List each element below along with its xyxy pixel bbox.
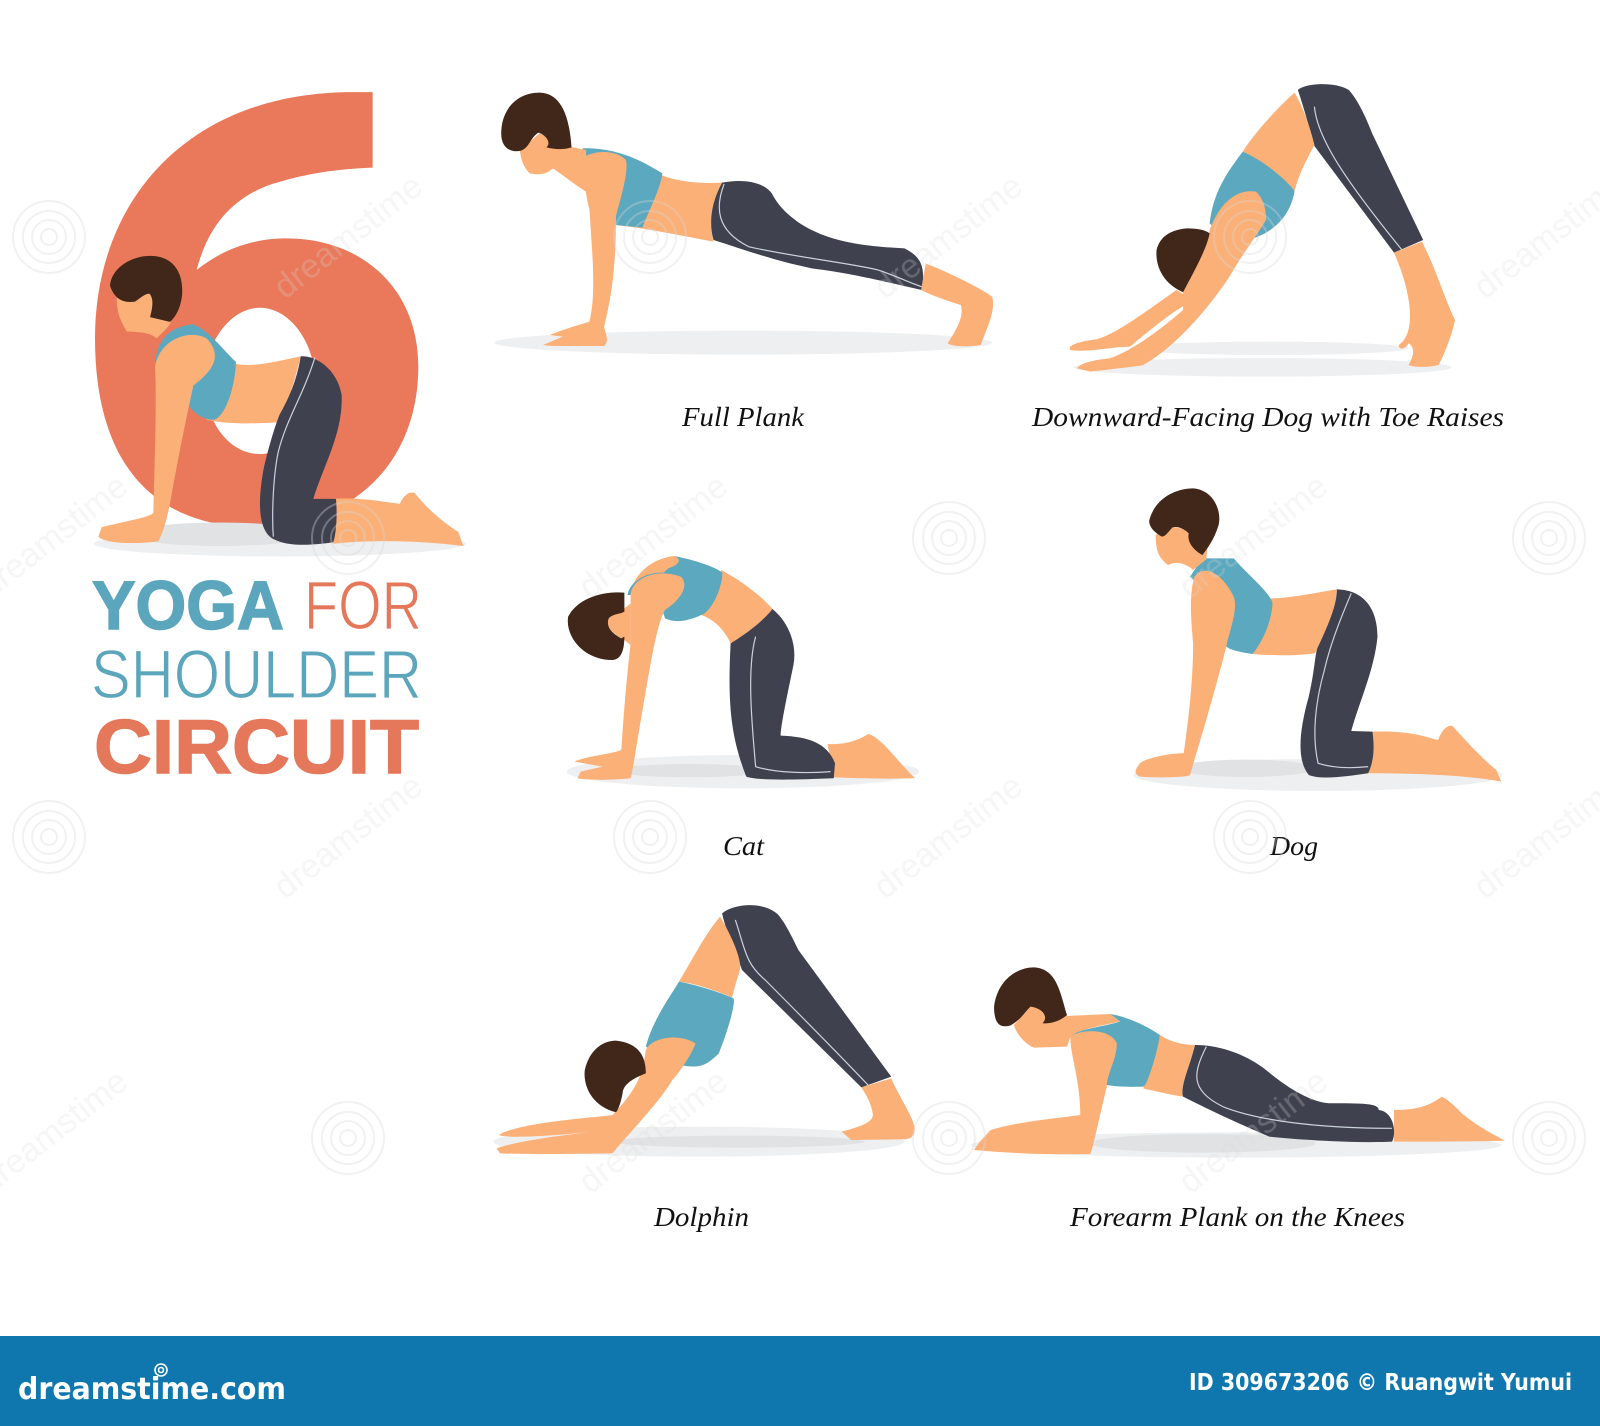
label: Dolphin: Dolphin (653, 1202, 749, 1232)
footer logo: dreamstime.com: dreamstime.com (18, 1372, 286, 1407)
figure: full plank (495, 93, 993, 355)
floor shadow (493, 1127, 905, 1157)
arm and hand (1136, 571, 1235, 777)
hair (110, 256, 182, 322)
hair (994, 967, 1067, 1026)
face (608, 603, 631, 645)
sports top (155, 324, 236, 420)
neck and face (520, 133, 586, 192)
title (91, 567, 422, 790)
text: dreamstime (572, 1062, 735, 1201)
text: dreamstime (867, 767, 1030, 906)
back and shoulder (1034, 1014, 1120, 1048)
thigh (679, 917, 740, 997)
text: dreamstime (867, 167, 1030, 306)
sports top (1210, 152, 1295, 238)
arm and hand (974, 1031, 1117, 1154)
floor shadow (971, 1132, 1501, 1158)
arm and shoulder (98, 335, 215, 543)
floor shadow (495, 331, 992, 355)
far arm (1070, 290, 1193, 351)
figure: forearm plank on the knees (971, 967, 1505, 1158)
figure: downward-facing dog with toe raises (1070, 84, 1455, 377)
pants (1301, 589, 1378, 778)
title word: CIRCUIT: CIRCUIT (94, 705, 419, 790)
top strap (628, 573, 687, 595)
logo spiral mark (155, 1364, 167, 1376)
sports top (652, 556, 722, 621)
pants (1298, 84, 1423, 253)
torso (616, 172, 722, 242)
pants (711, 181, 923, 290)
text: dreamstime (1172, 467, 1335, 606)
face and neck (117, 287, 172, 338)
shoulder (631, 556, 679, 593)
lower leg and foot (841, 1078, 915, 1140)
sports top (646, 982, 734, 1066)
arms and shoulder (497, 1038, 696, 1154)
figure: cat pose (567, 556, 919, 788)
torso (207, 356, 301, 423)
title word: YOGA: YOGA (92, 567, 284, 644)
sports top (1190, 558, 1272, 654)
hair (585, 1041, 646, 1112)
hair (501, 93, 572, 151)
lower leg and foot (1394, 242, 1455, 367)
floor shadow (1134, 759, 1502, 791)
floor shadow (94, 522, 466, 556)
label: Forearm Plank on the Knees: Forearm Plank on the Knees (1069, 1202, 1405, 1232)
sports top (1070, 1014, 1160, 1087)
torso (701, 570, 772, 643)
arm and hands (574, 573, 684, 780)
text: dreamstime (267, 167, 430, 306)
foot (1394, 1097, 1505, 1142)
hair (1149, 488, 1219, 555)
lower leg and foot (333, 492, 463, 546)
figure: dog pose (1134, 488, 1502, 791)
title word: FOR: FOR (304, 567, 422, 644)
figure: cat-dog cover pose (94, 256, 466, 556)
foot (828, 734, 915, 779)
near arm and shoulder (1077, 191, 1266, 372)
pants (260, 356, 342, 545)
label: Dog: Dog (1269, 831, 1318, 861)
title word: SHOULDER: SHOULDER (91, 636, 422, 713)
text: dreamstime (572, 467, 735, 606)
arm and hand (543, 152, 627, 346)
shin and foot (1368, 726, 1501, 782)
label: Downward-Facing Dog with Toe Raises: Downward-Facing Dog with Toe Raises (1031, 402, 1504, 432)
hair (568, 592, 624, 660)
thigh (1243, 93, 1314, 192)
face (1014, 1007, 1072, 1048)
figure: dolphin pose (493, 905, 915, 1157)
label: Full Plank: Full Plank (681, 402, 805, 432)
text: dreamstime (1172, 1062, 1335, 1201)
text: dreamstime (267, 767, 430, 906)
floor shadow (567, 755, 919, 788)
pants (722, 905, 891, 1087)
hair (1156, 228, 1210, 292)
number 6 (95, 92, 418, 527)
lower leg and foot (921, 263, 993, 346)
footer bar (0, 1336, 1600, 1426)
sports top (579, 148, 662, 228)
pants (730, 609, 835, 780)
label: Cat: Cat (723, 831, 766, 861)
pants (1182, 1045, 1394, 1142)
torso (1252, 589, 1337, 655)
face and neck (1156, 527, 1209, 570)
torso (1143, 1035, 1195, 1097)
floor shadows (1074, 342, 1452, 377)
